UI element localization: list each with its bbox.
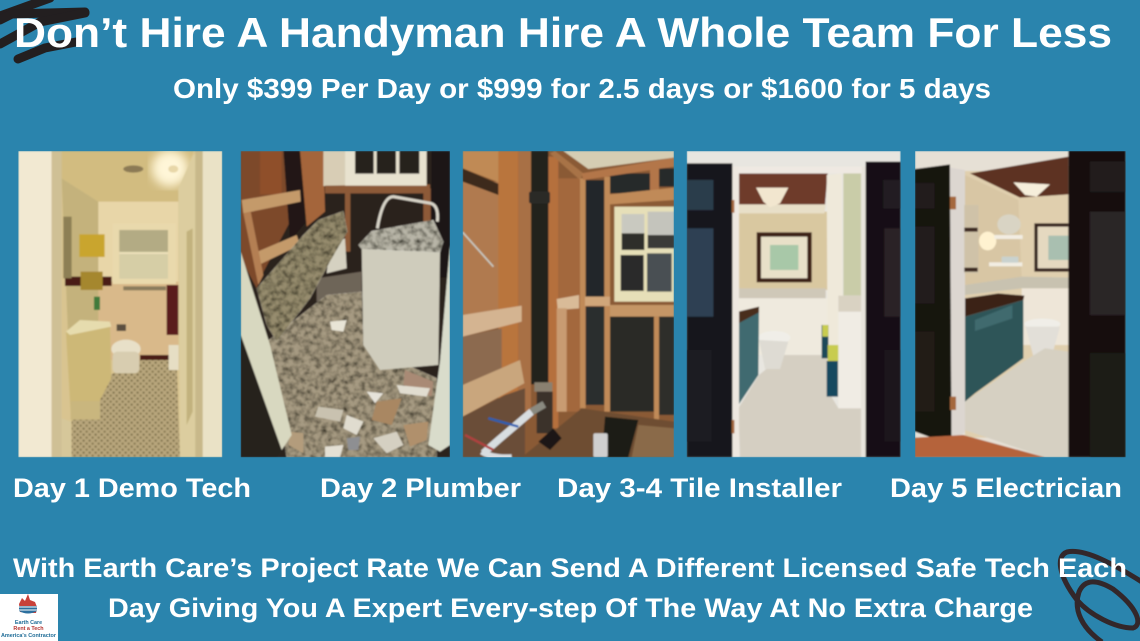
logo: Earth Care Rent a Tech: Rent a Tech [13, 626, 44, 632]
closing statement [13, 553, 1127, 623]
logo: Earth Care Rent a Tech: America's Contractor [1, 633, 56, 639]
caption: day 2: Day 2 Plumber [320, 473, 522, 503]
scribble: bottom right loops [1060, 551, 1140, 641]
icon: logo emblem [18, 594, 39, 614]
photo: finished bathroom with vanity [915, 151, 1126, 458]
caption: day 1: Day 1 Demo Tech [13, 473, 251, 503]
scribble: top left brush strokes [0, 0, 85, 59]
caption: day 3-4: Day 3-4 Tile Installer [557, 473, 843, 503]
logo: Earth Care Rent a Tech: Earth Care [15, 620, 42, 626]
subtitle: pricing: Only $399 Per Day or $999 for 2.5 days or $1600 for 5 days [173, 73, 991, 104]
title: Don’t Hire A Handyman Hire A Whole Team For Less [14, 9, 1112, 56]
logo: Earth Care Rent a Tech [0, 594, 58, 641]
closing statement: With Earth Care’s Project Rate We Can Send A Different Licensed Safe Tech Each [13, 553, 1127, 583]
photo: finished bathroom with art and curtain [686, 151, 901, 458]
caption: day 5: Day 5 Electrician [890, 473, 1122, 503]
photo: original bathroom before demolition [18, 151, 222, 458]
closing statement: Day Giving You A Expert Every-step Of The Way At No Extra Charge [108, 593, 1033, 623]
photo: exposed framing and plumbing [462, 151, 674, 458]
photo: demolition debris [240, 151, 450, 458]
